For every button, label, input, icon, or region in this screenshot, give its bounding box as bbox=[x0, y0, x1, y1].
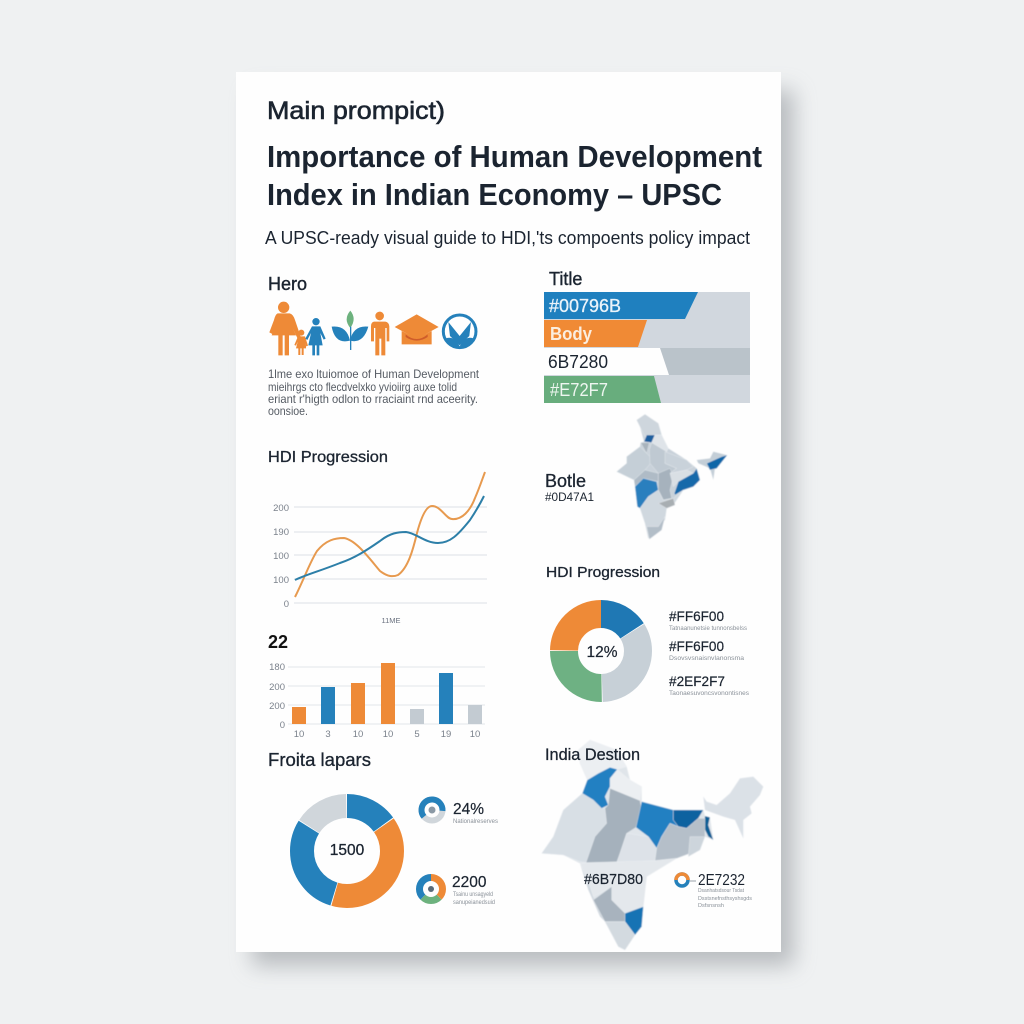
legend: Taonaesuvoncsvonontisnes bbox=[669, 691, 749, 697]
line chart bbox=[273, 472, 487, 625]
icon: adult bbox=[371, 312, 389, 355]
stat: 24%: Nationalreserves bbox=[453, 819, 498, 825]
pie chart bbox=[564, 614, 638, 688]
heading: 22: 22 bbox=[268, 632, 288, 652]
heading: title: Title bbox=[549, 269, 582, 289]
legend: #FF6F00 bbox=[669, 608, 724, 624]
swatch: green: #E72F7 bbox=[550, 380, 608, 400]
bar chart: 10 bbox=[294, 729, 304, 740]
icon: blue figure bbox=[305, 318, 326, 355]
legend: #2EF2F7 bbox=[669, 673, 725, 689]
title: Index in Indian Economy – UPSC bbox=[267, 177, 722, 212]
title: Importance of Human Development bbox=[267, 139, 762, 174]
heading: botle: #0D47A1 bbox=[545, 492, 594, 504]
heading: hero: Hero bbox=[268, 274, 307, 294]
small india map bbox=[617, 414, 727, 539]
bar chart: 10 bbox=[353, 729, 363, 740]
heading: india destion: India Destion bbox=[545, 746, 640, 764]
hero icon row bbox=[269, 302, 476, 355]
stat: 24%: 24% bbox=[453, 801, 484, 818]
panel: poster card bbox=[236, 72, 781, 952]
title bbox=[267, 139, 762, 212]
swatch: grey bbox=[544, 348, 750, 375]
map callout bbox=[676, 872, 752, 909]
colour swatch bars bbox=[544, 292, 750, 403]
heading: botle bbox=[545, 471, 594, 504]
swatch: blue: #00796B bbox=[549, 296, 621, 316]
hero body text: oonsioe. bbox=[268, 404, 308, 418]
bar chart: 200 bbox=[269, 701, 285, 712]
large india map bbox=[542, 740, 763, 950]
line chart: 100 bbox=[273, 575, 289, 586]
legend: Tatnaanunetsie tunnonsbelss bbox=[669, 626, 747, 632]
bar chart: 5 bbox=[414, 729, 420, 740]
stat: 2200: Tsainu unsagyeld bbox=[453, 892, 493, 898]
legend: #FF6F00 bbox=[669, 638, 724, 654]
icon: adult woman bbox=[269, 302, 301, 355]
pie chart: 12% bbox=[586, 644, 618, 661]
line chart: 190 bbox=[273, 527, 289, 538]
hero body text bbox=[268, 367, 480, 418]
line chart: 11ME bbox=[381, 616, 401, 625]
map callout: 2E7232 bbox=[698, 872, 745, 889]
icon: plant bbox=[332, 311, 368, 350]
icon: graduation cap bbox=[395, 314, 439, 344]
icon: circular emblem bbox=[443, 315, 476, 348]
hero body text: 1lme exo ltuiomoe of Human Development bbox=[268, 367, 480, 381]
swatch: green bbox=[544, 376, 661, 403]
stat: 24% bbox=[417, 795, 498, 825]
subtitle: A UPSC-ready visual guide to HDI,'ts compoents policy impact bbox=[265, 227, 750, 248]
bar chart: 3 bbox=[325, 729, 331, 740]
heading: frolta lapars: Froita lapars bbox=[268, 750, 371, 770]
swatch: orange bbox=[544, 320, 647, 347]
bar chart: 10 bbox=[470, 729, 480, 740]
bar chart: 0 bbox=[280, 720, 285, 731]
stat: 2200 bbox=[420, 874, 495, 906]
map callout: Dsstsnefnsthsyshsgds bbox=[698, 896, 752, 902]
heading: botle: Botle bbox=[545, 471, 586, 491]
hero body text: eriant r'higth odlon to rraciaint rnd aceerity. bbox=[268, 392, 478, 406]
large donut chart: 1500 bbox=[330, 842, 365, 859]
bar chart: 200 bbox=[269, 682, 285, 693]
map label: #6B7D80 bbox=[584, 871, 643, 888]
swatch: grey: 6B7280 bbox=[548, 352, 608, 372]
heading: hdi progression 2: HDI Progression bbox=[546, 565, 660, 581]
stat: 2200: 2200 bbox=[452, 874, 487, 891]
stat: 2200: sanupeianedsuid bbox=[453, 900, 495, 906]
heading: hdi progression: HDI Progression bbox=[268, 449, 388, 466]
line chart: 0 bbox=[284, 599, 289, 610]
legend: Dsovsvsnaisnvlanonsma bbox=[669, 656, 745, 662]
bar chart: 19 bbox=[441, 729, 451, 740]
hero body text: mieihrgs cto flecdvelxko yvioiirg auxe tolid bbox=[268, 380, 457, 394]
bar chart: 180 bbox=[269, 662, 285, 673]
line chart: 100 bbox=[273, 551, 289, 562]
bar chart bbox=[269, 662, 485, 740]
swatch: orange: Body bbox=[550, 324, 592, 344]
map callout: Dsfsnsnsh bbox=[698, 903, 724, 909]
icon: child bbox=[294, 330, 308, 355]
line chart: 200 bbox=[273, 503, 289, 514]
heading: main prompt: Main prompict) bbox=[267, 97, 445, 125]
legend bbox=[669, 608, 749, 697]
swatch: blue bbox=[544, 292, 698, 319]
large donut chart bbox=[302, 806, 392, 896]
map callout: Dsanhatsdsour Tsdat bbox=[698, 888, 744, 894]
bar chart: 10 bbox=[383, 729, 393, 740]
